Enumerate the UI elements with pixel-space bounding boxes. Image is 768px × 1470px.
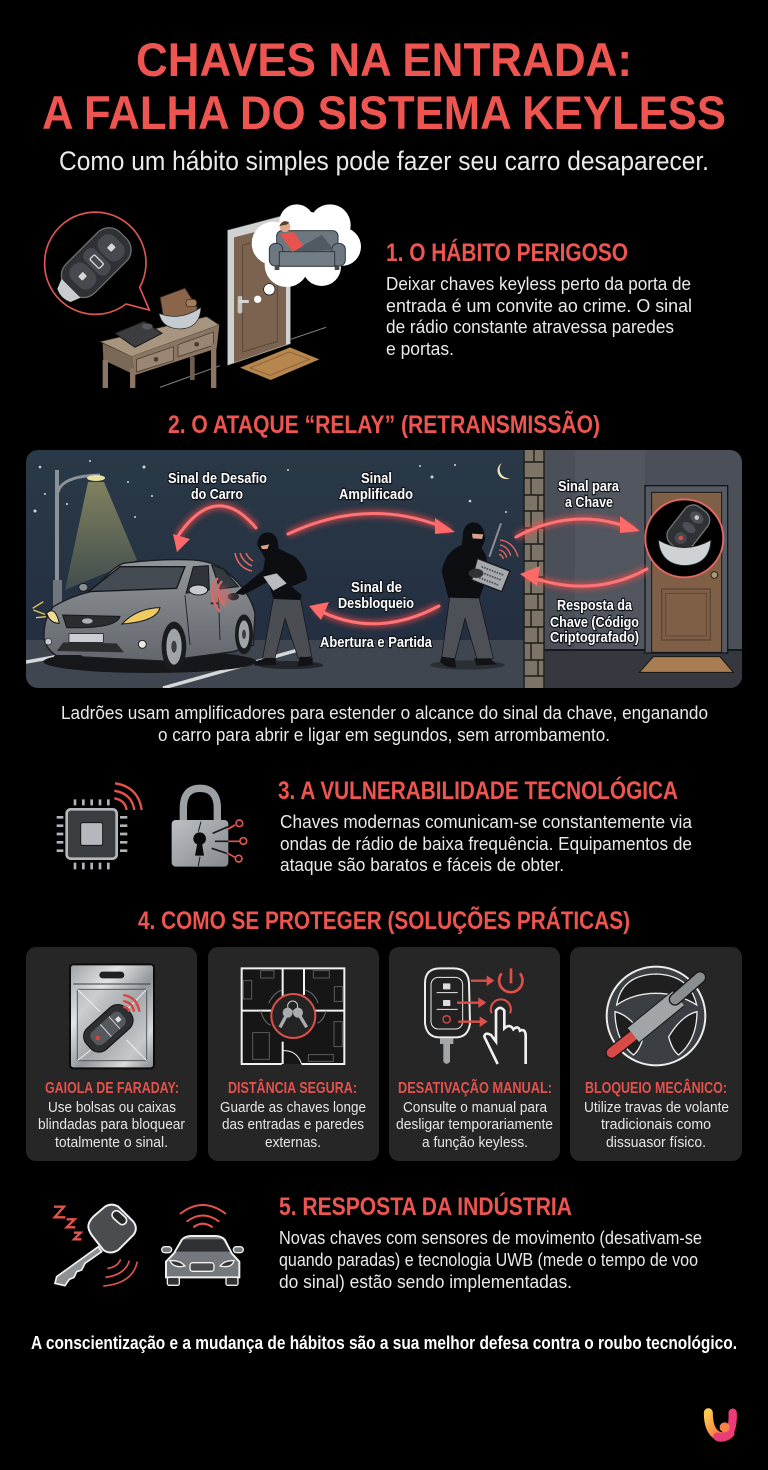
scene labels: Sinal de: [351, 579, 402, 596]
card text: [396, 1079, 553, 1151]
panel: safe distance: [208, 947, 379, 1161]
panel: mechanical lock: [570, 947, 742, 1161]
thief with amplifier: [430, 522, 518, 670]
scene labels: Sinal de Desafio: [168, 470, 267, 487]
signal arrows: [173, 506, 647, 624]
signal waves at door: [212, 553, 253, 612]
icon: padlock with broken circuit: [172, 788, 247, 867]
section 3 text: ataque são baratos e fáceis de obter.: [280, 854, 564, 875]
card text: Utilize travas de volante: [584, 1099, 729, 1116]
card text: GAIOLA DE FARADAY:: [45, 1080, 179, 1097]
icon: steering wheel lock: [607, 967, 705, 1065]
scene labels: Resposta da: [557, 597, 633, 614]
icon: floor plan with keys: [242, 968, 344, 1064]
card text: BLOQUEIO MECÂNICO:: [585, 1079, 727, 1097]
panel: manual deactivation: [389, 947, 560, 1161]
card text: externas.: [265, 1134, 321, 1151]
title: A FALHA DO SISTEMA KEYLESS: [42, 86, 726, 139]
section 5 text: do sinal) estão sendo implementadas.: [279, 1271, 572, 1292]
section 2 text: Ladrões usam amplificadores para estender o alcance do sinal da chave, enganando: [61, 702, 708, 723]
card text: blindadas para bloquear: [38, 1116, 185, 1133]
card text: a função keyless.: [422, 1134, 528, 1151]
car: [33, 560, 257, 673]
card text: Use bolsas ou caixas: [48, 1099, 176, 1116]
card text: Consulte o manual para: [403, 1099, 548, 1116]
section 3 heading: 3. A VULNERABILIDADE TECNOLÓGICA: [278, 775, 678, 805]
moon: [498, 463, 510, 479]
icon: shielded pouch: [70, 964, 154, 1068]
section 3 text: [280, 811, 693, 875]
scene labels: Desbloqueio: [338, 595, 414, 612]
scene labels: Criptografado): [550, 629, 639, 646]
card text: totalmente o sinal.: [55, 1134, 168, 1151]
card text: DISTÂNCIA SEGURA:: [228, 1079, 357, 1097]
panel: relay attack scene: [26, 450, 742, 688]
section 5 text: quando paradas) e tecnologia UWB (mede o tempo de voo: [279, 1249, 698, 1270]
brick column: [524, 450, 544, 688]
scene labels: Abertura e Partida: [320, 634, 433, 651]
card text: [584, 1079, 729, 1151]
card text: dissuasor físico.: [606, 1134, 706, 1151]
section 4 heading: 4. COMO SE PROTEGER (SOLUÇÕES PRÁTICAS): [138, 905, 630, 935]
section 1 text: [386, 273, 692, 359]
icon: key fob and power gesture: [425, 968, 526, 1064]
card text: das entradas e paredes: [222, 1116, 364, 1133]
panel: Faraday cage: [26, 947, 197, 1161]
title: [42, 33, 726, 139]
card text: Guarde as chaves longe: [220, 1099, 366, 1116]
scene labels: Sinal para: [558, 478, 620, 495]
scene labels: do Carro: [191, 486, 243, 503]
scene labels: a Chave: [565, 494, 613, 511]
icon: sleeping key with motion sensor: [54, 1205, 137, 1286]
section 5 heading: 5. RESPOSTA DA INDÚSTRIA: [279, 1191, 572, 1221]
section 2 heading: 2. O ATAQUE “RELAY” (RETRANSMISSÃO): [168, 409, 600, 439]
card text: desligar temporariamente: [396, 1116, 553, 1133]
section 3 text: Chaves modernas comunicam-se constantemente via: [280, 811, 693, 832]
scene labels: [168, 470, 639, 651]
card text: [220, 1079, 366, 1151]
section 1 text: Deixar chaves keyless perto da porta de: [386, 273, 691, 294]
card text: [38, 1080, 185, 1151]
card text: DESATIVAÇÃO MANUAL:: [398, 1079, 552, 1097]
section 1 heading: 1. O HÁBITO PERIGOSO: [386, 238, 628, 267]
road markings: [26, 650, 298, 688]
card text: tradicionais como: [601, 1116, 711, 1133]
icon: chip with wireless signal: [57, 783, 142, 869]
section 5 text: Novas chaves com sensores de movimento (desativam-se: [279, 1227, 702, 1248]
section 2 text: o carro para abrir e ligar em segundos, sem arrombamento.: [158, 724, 610, 745]
section 5 text: [279, 1227, 702, 1292]
section 1 text: e portas.: [386, 338, 454, 359]
thief at car door: [228, 532, 323, 669]
section 1 text: de rádio constante atravessa paredes: [386, 316, 674, 337]
street lamp: [53, 470, 137, 610]
section 1 text: entrada é um convite ao crime. O sinal: [386, 295, 692, 316]
key in bowl callout: [645, 499, 723, 577]
front door with key bowl: [639, 486, 733, 672]
scene labels: Sinal: [361, 470, 392, 487]
icon: car with wireless signal: [162, 1205, 243, 1285]
scene labels: Amplificado: [339, 486, 413, 503]
subtitle: Como um hábito simples pode fazer seu carro desaparecer.: [59, 146, 709, 176]
title: CHAVES NA ENTRADA:: [136, 33, 632, 86]
illustration: keys on a table near the front door: [45, 204, 361, 388]
section 3 text: ondas de rádio de baixa frequência. Equipamentos de: [280, 833, 692, 854]
scene labels: Chave (Código: [550, 614, 639, 631]
section 2 text: [61, 702, 708, 745]
logo: [708, 1413, 733, 1438]
